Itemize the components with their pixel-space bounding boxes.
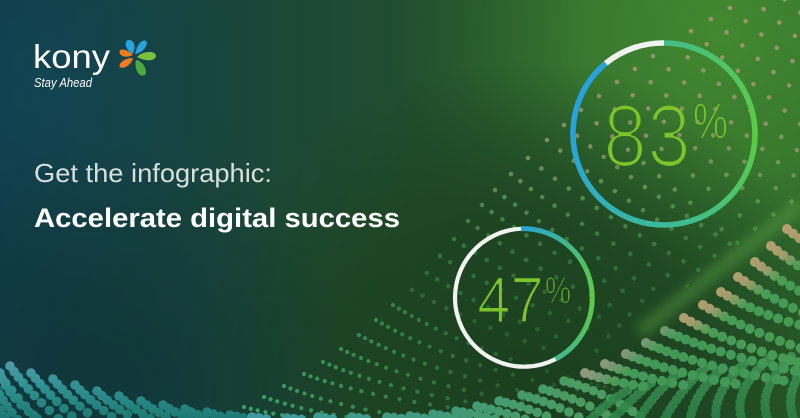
dot wave: crest rows upper xyxy=(684,229,800,364)
icon: kony petals xyxy=(119,40,156,76)
heading: accelerate digital success: Accelerate digital success xyxy=(34,203,400,233)
dot wave: bottom centre ridge xyxy=(252,381,644,418)
chart value: 83: 83 xyxy=(603,86,691,185)
dot wave: small dots field xyxy=(412,0,800,360)
logo tagline: Stay Ahead xyxy=(34,76,93,90)
chart unit: 83 percent sign: % xyxy=(693,93,728,149)
chart: 83% ring xyxy=(573,43,755,225)
heading: get the infographic: Get the infographic: xyxy=(34,158,272,188)
logo wordmark: kony xyxy=(33,38,111,75)
dot wave: small dots lower left xyxy=(244,305,613,418)
dot wave: bottom right strands xyxy=(590,356,800,418)
chart: 47% ring xyxy=(455,229,592,367)
chart value: 47: 47 xyxy=(477,264,544,336)
light streak along wave crest xyxy=(640,205,800,332)
logo: Kony xyxy=(33,38,156,90)
dot wave: crest rows lower xyxy=(585,331,800,387)
chart unit: 47 percent sign: % xyxy=(545,270,571,312)
dot wave: bottom left teal xyxy=(0,360,250,418)
